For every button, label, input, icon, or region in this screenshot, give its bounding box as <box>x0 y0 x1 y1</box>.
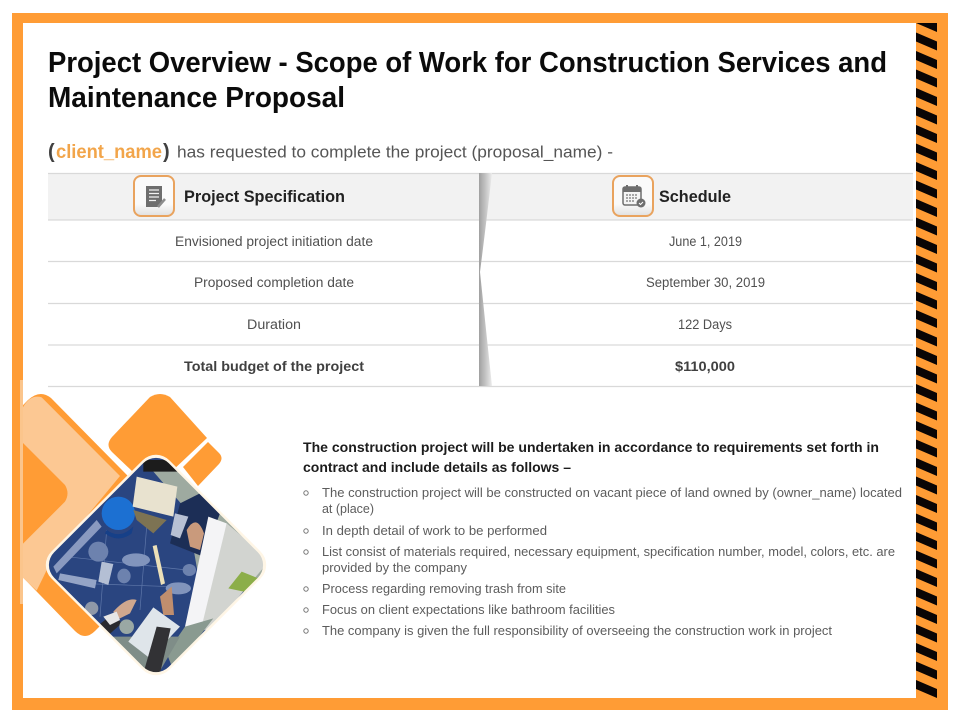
subtitle <box>48 141 613 163</box>
table <box>48 173 913 386</box>
bullet text: The company is given the full responsibility of overseeing the construction work in project <box>322 624 833 638</box>
column fold shadow <box>479 173 492 386</box>
table row: duration: Duration <box>247 317 301 332</box>
subtitle: has requested to complete the project (proposal_name) - <box>177 142 613 162</box>
photo outline <box>38 447 274 683</box>
table header background <box>48 173 913 220</box>
table header labels <box>184 188 731 206</box>
table header labels: Schedule <box>659 188 731 206</box>
title <box>48 47 887 114</box>
table row: duration: 122 Days <box>678 317 732 332</box>
light striped band <box>20 397 120 591</box>
subtitle: ) <box>163 141 170 163</box>
orange rounded square <box>108 394 207 490</box>
bullet text <box>322 486 902 638</box>
table row lines <box>48 174 913 386</box>
table row: completion date: September 30, 2019 <box>646 275 765 290</box>
body heading: contract and include details as follows – <box>303 460 571 475</box>
table row: completion date <box>194 275 765 290</box>
table row: total budget: Total budget of the project <box>184 359 365 374</box>
table row: total budget: $110,000 <box>675 359 735 374</box>
icon: document <box>134 176 174 216</box>
frame light overlay <box>20 380 23 604</box>
table row: initiation date: Envisioned project initiation date <box>175 234 373 249</box>
large orange band <box>23 394 128 636</box>
body heading <box>303 440 879 475</box>
bullet list <box>304 486 902 638</box>
photo content <box>47 457 270 677</box>
table row: completion date: Proposed completion date <box>194 275 354 290</box>
bullet text: The construction project will be constructed on vacant piece of land owned by (owner_name) located <box>322 486 902 500</box>
subtitle: ( <box>48 141 55 163</box>
title: Project Overview - Scope of Work for Construction Services and <box>48 47 887 79</box>
bullet text: Process regarding removing trash from site <box>322 582 566 596</box>
body heading: The construction project will be undertaken in accordance to requirements set forth in <box>303 440 879 455</box>
bullet text: In depth detail of work to be performed <box>322 524 547 538</box>
table row: duration <box>247 317 732 332</box>
icon: calendar <box>613 176 653 216</box>
table header labels: Project Specification <box>184 188 345 206</box>
bullet text: provided by the company <box>322 561 468 575</box>
bullet text: Focus on client expectations like bathroom facilities <box>322 603 615 617</box>
bullet text: at (place) <box>322 502 374 516</box>
decorative orange shapes <box>0 380 222 636</box>
table row: total budget <box>184 359 735 374</box>
table row: initiation date <box>175 234 742 249</box>
subtitle: client_name <box>56 142 162 163</box>
table row: initiation date: June 1, 2019 <box>669 234 742 249</box>
photo: construction plans on desk <box>46 454 266 676</box>
title: Maintenance Proposal <box>48 82 345 114</box>
bullet markers <box>304 491 308 633</box>
small orange rounded square <box>183 442 222 486</box>
hazard stripe band <box>916 14 937 698</box>
bullet text: List consist of materials required, necessary equipment, specification number, model, colors, etc. are <box>322 545 895 559</box>
